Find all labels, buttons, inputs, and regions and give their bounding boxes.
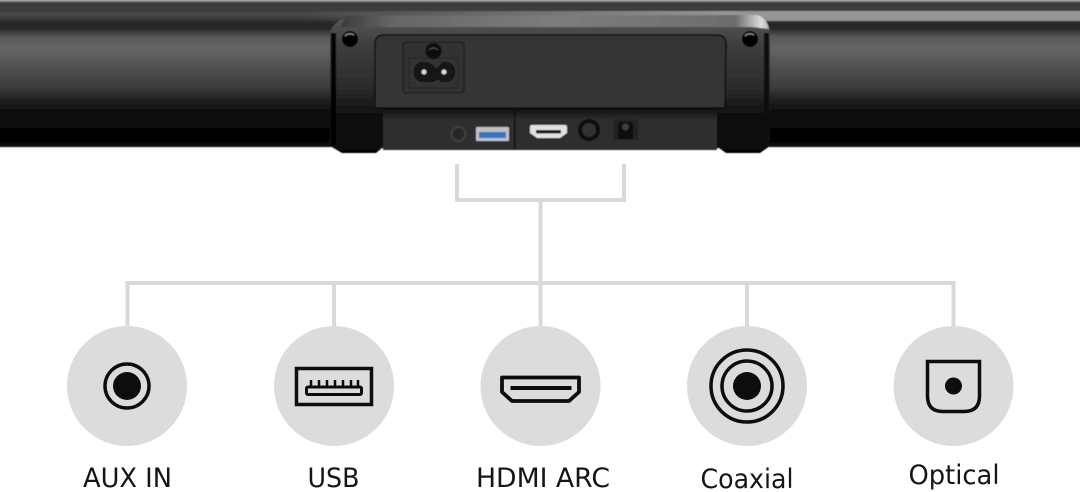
icon: hdmi port <box>480 326 600 446</box>
screw right <box>742 31 758 47</box>
label: Optical: Optical <box>908 460 1000 491</box>
icon: coaxial port <box>687 326 807 446</box>
port: hdmi <box>530 125 567 138</box>
item: AUX IN <box>67 326 187 492</box>
port: aux <box>452 127 466 141</box>
port: usb <box>476 127 509 141</box>
item: Optical <box>894 326 1014 491</box>
icon: usb port <box>274 326 394 446</box>
soundbar tube <box>0 1 1080 147</box>
connector lines <box>128 164 954 326</box>
soundbar rear photo <box>0 0 1080 153</box>
centre housing <box>330 18 770 153</box>
cover plate <box>375 35 726 108</box>
item: USB <box>274 326 394 492</box>
icon: aux jack <box>67 326 187 446</box>
port: optical <box>613 119 638 140</box>
port: coaxial <box>580 121 598 139</box>
port panel <box>383 108 717 150</box>
item: Coaxial <box>687 326 807 492</box>
power socket <box>403 42 464 93</box>
screw left <box>342 31 358 47</box>
item: HDMI ARC <box>476 326 610 492</box>
icon: optical port <box>894 326 1014 446</box>
